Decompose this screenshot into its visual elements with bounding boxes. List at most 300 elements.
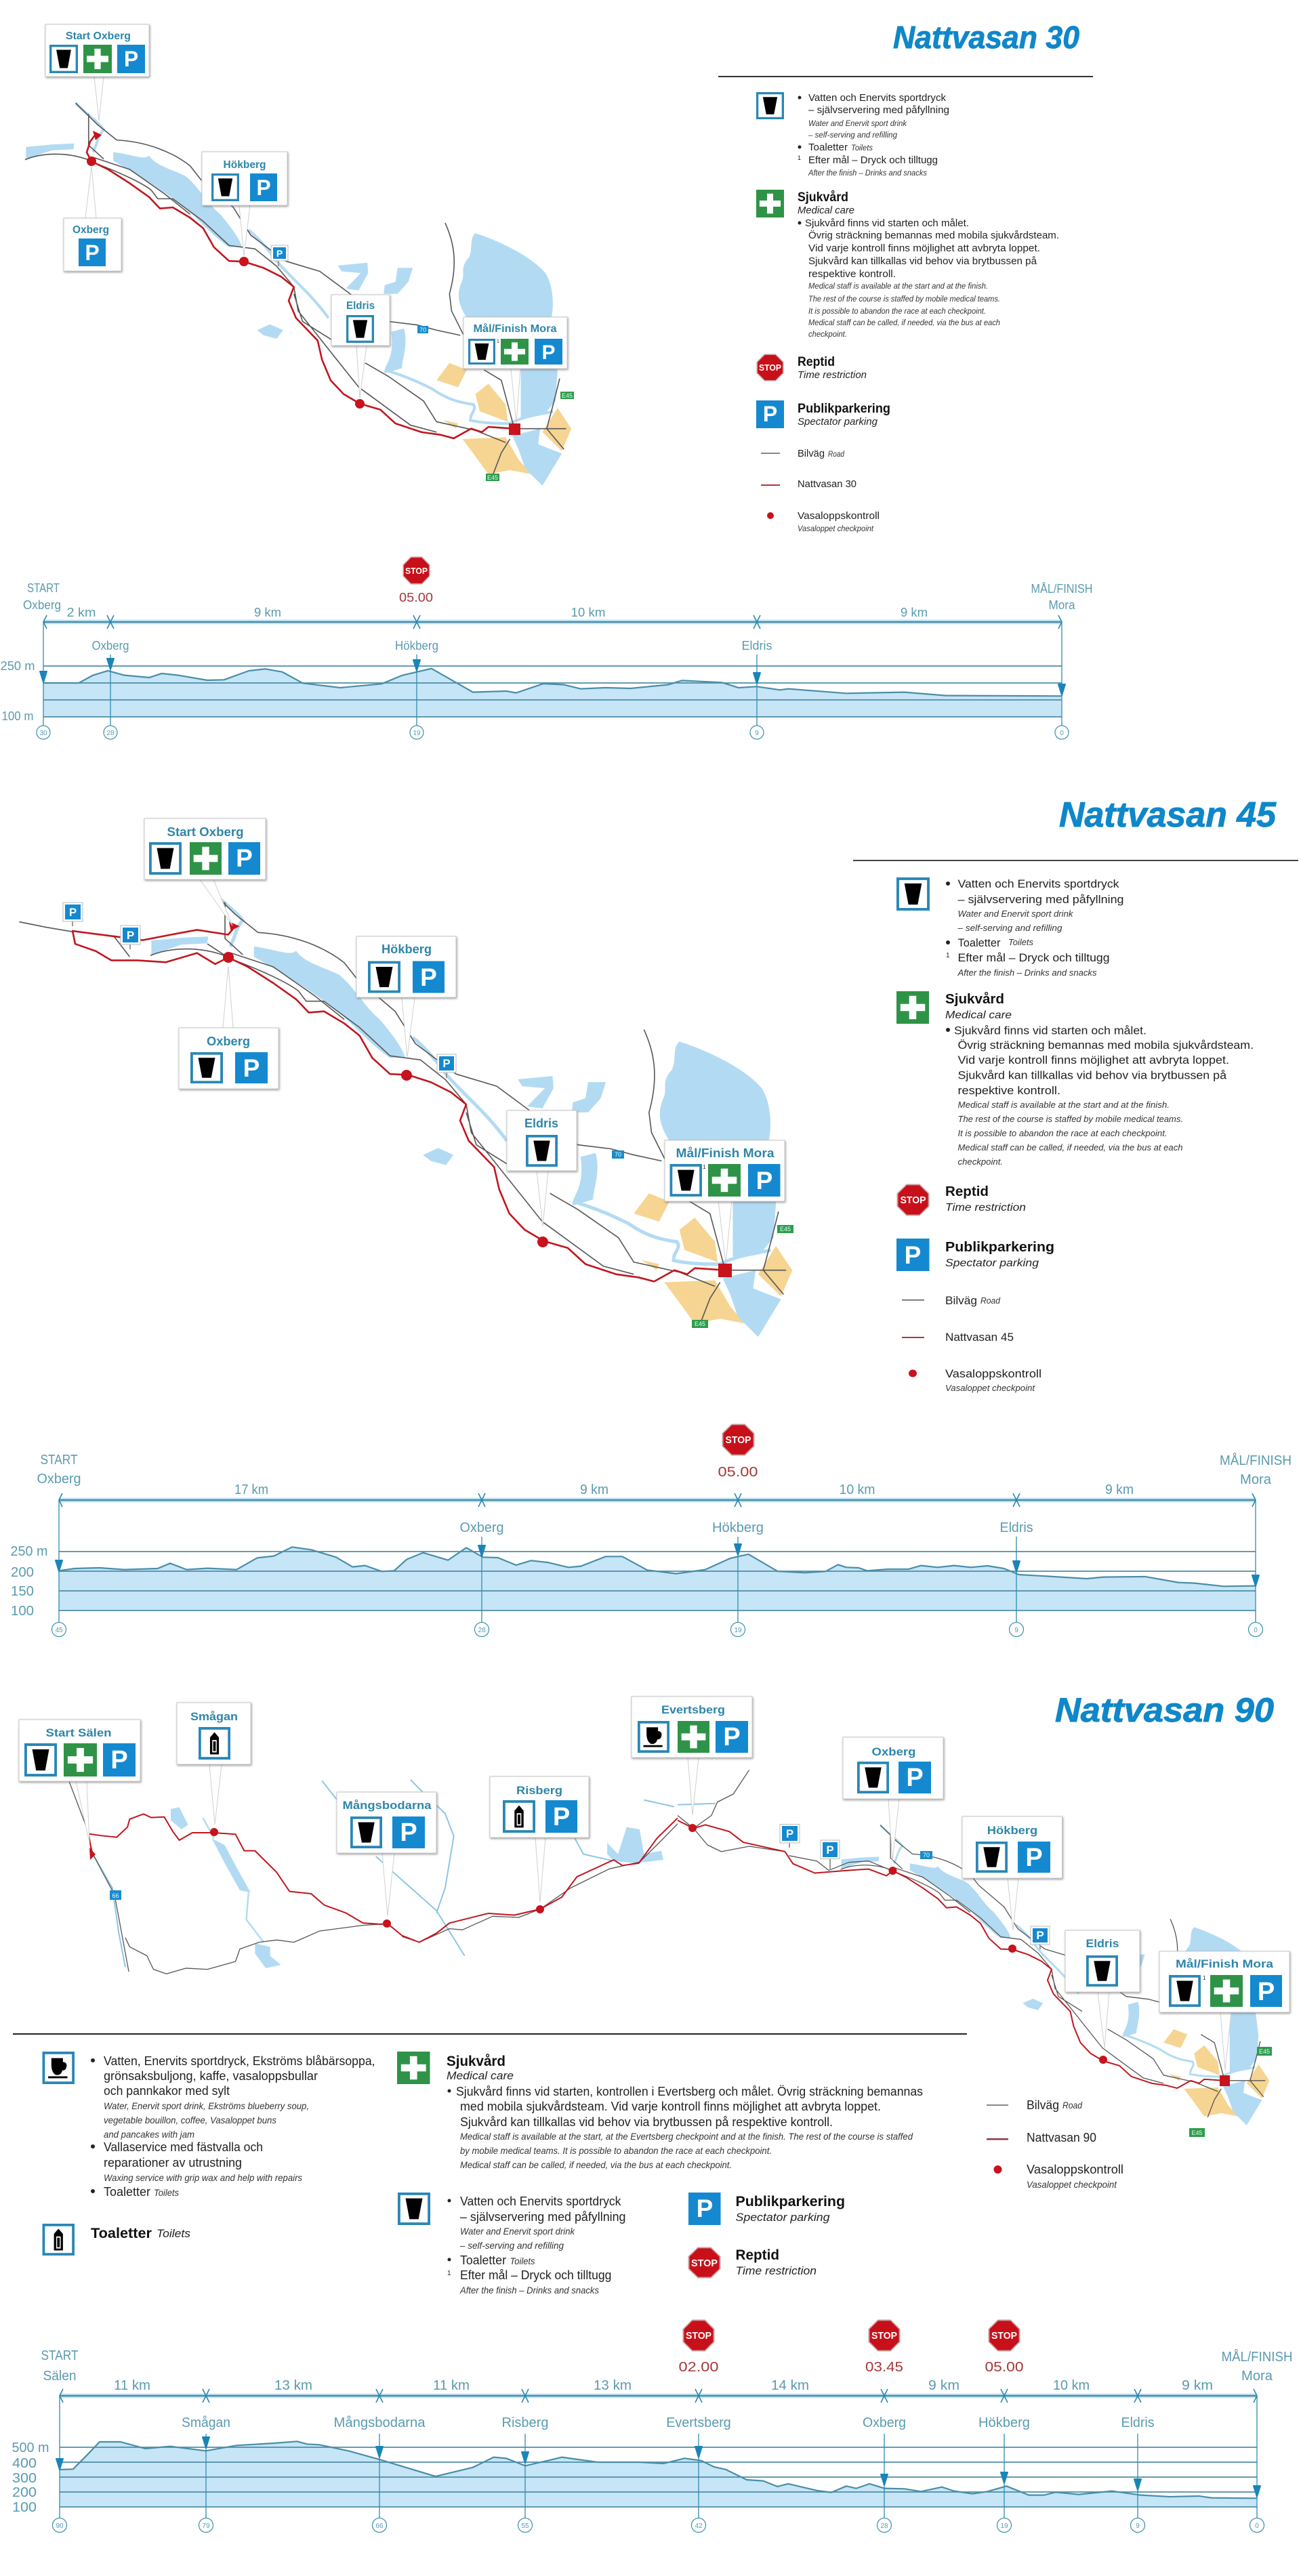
parking signs [63, 902, 456, 1078]
road sign 70 [920, 1851, 932, 1859]
axis labels: MÅL/FINISH [1031, 582, 1092, 596]
axis labels [0, 581, 1092, 723]
text: spectator parking: Publikparkering [798, 402, 890, 416]
distance markers: 55 [521, 2522, 529, 2530]
parking signs: P [127, 929, 134, 942]
text: water service: 1 [447, 2270, 451, 2277]
legend: checkpoint: Vasaloppet checkpoint [798, 525, 874, 533]
axis labels: Mora [1241, 2369, 1273, 2384]
callout: Smågan: Smågan [190, 1710, 238, 1723]
distance markers: 30 [39, 730, 47, 737]
text: medical care [447, 2054, 923, 2170]
callout: Oxberg [843, 1737, 943, 1861]
text: spectator parking [798, 402, 890, 428]
text: coffee station services: reparationer av utrustning [104, 2156, 242, 2169]
text: coffee station services: Vallaservice med fästvalla och [104, 2140, 263, 2154]
axis labels: 13 km [274, 2378, 312, 2393]
text: coffee station services: vegetable bouillon, coffee, Vasaloppet buns [104, 2115, 276, 2125]
icon: parking [756, 400, 784, 428]
text: water service: – självservering med påfyllning [958, 893, 1123, 906]
icon: medical [896, 991, 929, 1024]
legend: checkpoint [993, 2163, 1123, 2190]
distance markers: 45 [55, 1627, 63, 1634]
callout: Eldris: Eldris [346, 300, 375, 312]
text: water service: Toaletter [958, 936, 1001, 949]
text: medical care: Medical care [447, 2069, 514, 2082]
legend: checkpoint [767, 510, 880, 533]
text: water service: Vatten och Enervits sportdryck [460, 2195, 621, 2208]
callout: Start Oxberg: P [124, 47, 138, 71]
axis labels: Hökberg [395, 639, 438, 652]
text: water service: Toilets [510, 2256, 535, 2266]
axis labels: 200 [11, 1565, 34, 1580]
icon: stop [756, 354, 784, 381]
text: medical care: by mobile medical teams. It is possible to abandon the race at each checkpoint. [460, 2145, 772, 2156]
callout: Risberg [490, 1777, 589, 1903]
axis labels: START [41, 2348, 79, 2363]
callout: Eldris [507, 1110, 577, 1226]
icon: water [758, 94, 783, 118]
callout: Smågan [177, 1703, 251, 1825]
axis labels: 200 [12, 2485, 37, 2500]
callout: Mål/Finish Mora [463, 317, 567, 423]
legend: road [902, 1294, 1001, 1307]
stop marker 05.00 [985, 2319, 1023, 2375]
text: medical care: respektive kontroll. [808, 268, 896, 280]
axis labels: Mora [1049, 598, 1075, 612]
text: time restriction [945, 1184, 1026, 1213]
axis labels: Eldris [1000, 1520, 1033, 1535]
text: water service: – självservering med påfyllning [808, 104, 949, 116]
elevation profile: Nattvasan 45 [11, 1424, 1292, 1637]
text: medical care: The rest of the course is staffed by mobile medical teams. [808, 295, 1000, 304]
text: time restriction: Reptid [798, 355, 835, 369]
stop marker 05.00: STOP [405, 566, 428, 576]
icon: start flag [93, 131, 102, 140]
text: medical care: It is possible to abandon the race at each checkpoint. [808, 308, 986, 316]
callout: Hökberg: P [256, 175, 271, 200]
text: water service: After the finish – Drinks and snacks [808, 169, 927, 178]
text: medical care: Övrig sträckning bemannas med mobila sjukvårdsteam. [808, 229, 1059, 241]
text: water service: Vatten och Enervits sportdryck [958, 877, 1119, 890]
parking signs: P [1036, 1929, 1044, 1942]
text: coffee station services: and pancakes with jam [104, 2129, 194, 2140]
parking sign: P [276, 248, 283, 259]
distance markers: 79 [202, 2522, 210, 2530]
road sign E45 [777, 1225, 793, 1233]
distance markers: 28 [478, 1627, 486, 1634]
axis labels: 9 km [928, 2378, 959, 2393]
text: water service: Efter mål – Dryck och tilltugg [958, 951, 1110, 964]
road sign 70 [612, 1150, 624, 1159]
checkpoint Eldris [355, 399, 365, 409]
icon: coffee station [43, 2053, 73, 2083]
icon: parking [896, 1239, 930, 1271]
callout: Hökberg [202, 152, 287, 256]
parking signs [780, 1824, 1050, 1949]
text: medical care: Medical staff is available at the start, at the Evertsberg checkpoint and at the finish. The rest of the course is staffed [460, 2131, 913, 2142]
callout: Oxberg: P [906, 1764, 924, 1792]
text: water service: Toaletter [808, 142, 848, 153]
legend: road [987, 2098, 1083, 2112]
icon: parking: P [697, 2195, 713, 2222]
text: coffee station services: och pannkakor med sylt [104, 2084, 230, 2098]
callout: Start Oxberg [45, 24, 149, 121]
callout: Start Sälen [19, 1720, 140, 1843]
axis labels: Sälen [43, 2369, 76, 2384]
icon: stop: STOP [900, 1194, 926, 1206]
distance markers [37, 726, 1069, 739]
distance markers: 28 [106, 730, 115, 737]
text: coffee station services: Waxing service with grip wax and help with repairs [104, 2172, 302, 2183]
axis labels: 400 [12, 2456, 37, 2471]
legend rule [718, 76, 1093, 77]
callout: Mål/Finish Mora [665, 1140, 785, 1264]
icon: stop [688, 2247, 721, 2279]
axis labels: Eldris [741, 639, 772, 652]
callout: Oxberg: Oxberg [871, 1745, 916, 1758]
axis labels: 13 km [594, 2378, 632, 2393]
text: medical care: Sjukvård kan tillkallas vid behov via brytbussen på respektive kontroll. [460, 2115, 833, 2129]
text: spectator parking: Spectator parking [736, 2211, 830, 2224]
distance markers: 9 [755, 730, 759, 737]
axis labels: 10 km [1053, 2378, 1090, 2393]
callout: Mångsbodarna [337, 1792, 436, 1916]
text: toilets: Toaletter [91, 2226, 152, 2241]
text: medical care: Sjukvård finns vid starten, kontrollen i Evertsberg och målet. Övrig sträckning bemannas [456, 2085, 923, 2098]
text: water service: Water and Enervit sport drink [808, 120, 907, 128]
axis labels: Risberg [501, 2415, 549, 2430]
parking signs: P [69, 906, 77, 919]
road sign E45: E45 [1259, 2048, 1270, 2055]
axis labels: Evertsberg [666, 2415, 731, 2430]
axis labels [11, 1453, 1292, 1619]
callout: Oxberg [179, 966, 278, 1089]
legend: checkpoint: Vasaloppskontroll [798, 510, 880, 522]
distance markers [51, 1622, 1263, 1637]
stop marker 05.00: 05.00 [399, 591, 433, 604]
axis labels: 11 km [114, 2378, 150, 2393]
axis labels: MÅL/FINISH [1221, 2349, 1293, 2365]
road sign E45 south: E45 [1191, 2130, 1203, 2136]
legend: road [761, 448, 845, 459]
legend: checkpoint: Vasaloppet checkpoint [1027, 2179, 1117, 2190]
legend: route: Nattvasan 30 [798, 478, 856, 490]
callout: Mål/Finish Mora: 1 [1203, 1975, 1206, 1981]
text: medical care: Medical care [798, 205, 854, 216]
callout: Hökberg [962, 1816, 1062, 1930]
callout: Start Sälen: P [110, 1746, 128, 1774]
axis labels: 11 km [433, 2378, 470, 2393]
text: medical care: Vid varje kontroll finns möjlighet att avbryta loppet. [958, 1054, 1229, 1066]
road sign 70 [417, 326, 428, 333]
callout: Hökberg: Hökberg [987, 1824, 1037, 1837]
map: Nattvasan 30 [25, 24, 574, 486]
text: water service: Vatten och Enervits sportdryck [808, 92, 946, 104]
axis labels: 2 km [66, 606, 96, 619]
text: medical care: med mobila sjukvårdsteam. Vid varje kontroll finns möjlighet att avbryta loppet. [460, 2100, 881, 2113]
distance markers: 9 [1014, 1627, 1018, 1634]
distance markers: 42 [695, 2522, 703, 2530]
text: toilets: Toilets [157, 2227, 191, 2240]
axis labels: START [41, 1453, 77, 1468]
road sign E45 [1257, 2047, 1272, 2056]
text: time restriction: Reptid [736, 2247, 779, 2263]
legend: road: Road [828, 451, 845, 459]
text: time restriction: Reptid [945, 1184, 989, 1199]
axis labels: 17 km [234, 1482, 268, 1497]
distance markers: 28 [880, 2522, 888, 2530]
stop marker 02.00: STOP [686, 2330, 711, 2342]
elevation profile: Nattvasan 90 [12, 2319, 1293, 2533]
legend: checkpoint: Vasaloppet checkpoint [945, 1383, 1035, 1393]
text: medical care: The rest of the course is staffed by mobile medical teams. [958, 1114, 1183, 1124]
legend: checkpoint [909, 1367, 1041, 1393]
legend: road: Bilväg [1027, 2098, 1059, 2112]
axis labels: 300 [12, 2471, 37, 2486]
axis labels: Eldris [1121, 2415, 1155, 2430]
axis labels: Oxberg [863, 2415, 906, 2430]
text: water service: After the finish – Drinks and snacks [957, 968, 1097, 978]
stop marker 03.45: 03.45 [865, 2360, 903, 2375]
callout: Eldris: Eldris [524, 1117, 558, 1130]
stop marker 05.00: 05.00 [718, 1465, 758, 1480]
road sign E45 south: E45 [487, 474, 498, 481]
axis labels: Oxberg [459, 1520, 504, 1535]
text: spectator parking [736, 2194, 845, 2224]
road sign E45: E45 [562, 392, 573, 399]
callout: Mål/Finish Mora: Mål/Finish Mora [676, 1146, 775, 1160]
distance markers: 0 [1255, 2522, 1259, 2530]
text: water service: After the finish – Drinks and snacks [459, 2285, 599, 2295]
callout: Oxberg: P [85, 241, 100, 265]
axis labels: 9 km [580, 1482, 608, 1497]
text: coffee station services: Toaletter [104, 2185, 150, 2199]
callout: Evertsberg: P [723, 1723, 741, 1751]
title: Nattvasan 45: Nattvasan 45 [1059, 795, 1277, 835]
callout: Start Oxberg: Start Oxberg [167, 825, 244, 839]
elevation profile: Nattvasan 30 [0, 556, 1092, 739]
text: coffee station services [91, 2054, 375, 2199]
callout: Mål/Finish Mora: P [1258, 1978, 1275, 2006]
text: medical care: checkpoint. [958, 1157, 1003, 1167]
text: water service [447, 2195, 626, 2295]
text: time restriction: Time restriction [798, 369, 867, 381]
callout: Hökberg: Hökberg [224, 159, 266, 171]
callout: Oxberg [64, 166, 121, 271]
distance markers: 90 [56, 2522, 64, 2530]
callout: Evertsberg: Evertsberg [661, 1703, 725, 1716]
callout: Mångsbodarna: P [400, 1819, 417, 1847]
callout: Hökberg: P [1025, 1844, 1043, 1872]
text: medical care: Sjukvård [447, 2054, 505, 2069]
stop marker 05.00 [718, 1424, 758, 1480]
text: water service: Efter mål – Dryck och tilltugg [808, 154, 938, 166]
distance markers: 19 [734, 1627, 742, 1634]
callout: Mål/Finish Mora: P [756, 1167, 772, 1194]
callout: Mål/Finish Mora [1159, 1951, 1289, 2070]
text: medical care: Sjukvård finns vid starten och målet. [805, 217, 969, 229]
text: water service: 1 [946, 952, 950, 959]
legend: road: Bilväg [945, 1294, 977, 1307]
axis labels: Mångsbodarna [333, 2415, 426, 2430]
text: water service: – self-serving and refilling [459, 2240, 564, 2251]
axis labels: 9 km [254, 606, 281, 619]
legend: road: Road [1062, 2100, 1083, 2111]
legend: checkpoint: Vasaloppskontroll [945, 1367, 1041, 1380]
text: spectator parking: Spectator parking [945, 1258, 1039, 1269]
axis labels: Mora [1240, 1472, 1272, 1487]
text: medical care [798, 190, 1059, 339]
axis labels: Oxberg [92, 639, 129, 652]
axis labels: 9 km [1105, 1482, 1134, 1497]
axis labels: 10 km [839, 1482, 875, 1497]
axis labels: Oxberg [37, 1472, 81, 1487]
text: water service: – självservering med påfyllning [460, 2210, 626, 2224]
axis labels: MÅL/FINISH [1220, 1453, 1292, 1468]
text: spectator parking [945, 1240, 1054, 1269]
axis labels: Oxberg [23, 598, 61, 612]
callout: Eldris [331, 295, 390, 398]
text: medical care: respektive kontroll. [958, 1084, 1060, 1097]
stop marker 03.45: STOP [871, 2330, 897, 2342]
icon: medical [756, 190, 784, 217]
callout: Mål/Finish Mora: Mål/Finish Mora [1176, 1957, 1274, 1970]
legend: route: Nattvasan 45 [945, 1331, 1014, 1344]
legend: Nattvasan 30 [756, 92, 1059, 533]
checkpoint Eldris [537, 1237, 548, 1247]
text: medical care: Medical staff is available at the start and at the finish. [808, 283, 988, 291]
text: medical care: Medical staff is available at the start and at the finish. [958, 1100, 1170, 1110]
text: medical care: checkpoint. [808, 331, 847, 339]
text: toilets [91, 2226, 191, 2241]
legend rule [13, 2033, 967, 2035]
icon: parking [688, 2193, 721, 2225]
callout: Risberg: P [553, 1803, 570, 1831]
text: water service: Toilets [851, 144, 873, 152]
legend: route: Nattvasan 90 [1027, 2131, 1096, 2144]
text: medical care: Medical staff can be called, if needed, via the bus at each [958, 1142, 1183, 1152]
parking signs: P [442, 1057, 451, 1070]
legend: checkpoint: Vasaloppskontroll [1027, 2163, 1123, 2176]
callout: Mål/Finish Mora: P [541, 341, 556, 364]
icon: start flag [89, 1848, 96, 1860]
distance markers [53, 2518, 1264, 2533]
axis labels: 100 m [1, 709, 34, 723]
icon: water [898, 879, 928, 909]
axis labels: 250 m [0, 659, 35, 673]
distance markers: 9 [1136, 2522, 1140, 2530]
icon: start flag [229, 921, 240, 931]
icon: toilets [43, 2225, 73, 2254]
callout: Risberg: Risberg [516, 1784, 562, 1797]
axis labels: Hökberg [978, 2415, 1030, 2430]
icon: parking: P [905, 1241, 921, 1269]
callout: Mångsbodarna: Mångsbodarna [343, 1799, 432, 1812]
text: water service: 1 [798, 154, 801, 161]
axis labels: 500 m [12, 2440, 49, 2455]
text: medical care [945, 991, 1254, 1167]
stop marker 05.00: STOP [991, 2330, 1017, 2342]
callout: Oxberg: Oxberg [73, 224, 109, 236]
callout: Hökberg: P [420, 963, 437, 991]
text: coffee station services: Water, Enervit sport drink, Ekströms blueberry soup, [104, 2100, 309, 2111]
axis labels: Smågan [182, 2415, 230, 2430]
title: Nattvasan 30: Nattvasan 30 [893, 20, 1079, 55]
distance markers: 0 [1060, 730, 1064, 737]
legend rule [853, 860, 1298, 861]
stop marker 02.00 [679, 2319, 718, 2375]
callout: Start Oxberg: P [236, 844, 253, 872]
callout: Eldris [1065, 1930, 1140, 2048]
text: water service: – self-serving and refilling [957, 923, 1062, 933]
text: water service: Toilets [1008, 937, 1033, 947]
parking signs: P [786, 1827, 793, 1840]
road sign E45 south [1189, 2128, 1205, 2137]
callout: Oxberg: Oxberg [207, 1035, 250, 1048]
text: time restriction [798, 355, 867, 381]
stop marker 03.45 [865, 2319, 903, 2375]
text: water service [798, 92, 949, 178]
checkpoint Oxberg [87, 157, 96, 166]
text: medical care: Sjukvård kan tillkallas vid behov via brytbussen på [808, 255, 1037, 267]
road sign 66: 66 [112, 1892, 119, 1899]
icon: stop: STOP [759, 362, 781, 373]
legend: Nattvasan 45 [896, 877, 1254, 1393]
text: spectator parking: Publikparkering [736, 2194, 845, 2209]
distance markers: 19 [413, 730, 421, 737]
parking sign [271, 245, 288, 266]
axis labels: 10 km [571, 606, 606, 619]
title: Nattvasan 90: Nattvasan 90 [1055, 1691, 1274, 1729]
text: time restriction: Time restriction [945, 1202, 1026, 1213]
text: water service: Water and Enervit sport drink [460, 2226, 575, 2237]
callout: Start Oxberg [144, 818, 266, 926]
icon: medical [397, 2052, 430, 2084]
callout: Mål/Finish Mora: Mål/Finish Mora [473, 323, 557, 335]
checkpoint Hökberg [239, 257, 249, 266]
road sign 70: 70 [615, 1151, 621, 1158]
axis labels: 9 km [901, 606, 928, 619]
text: medical care: Sjukvård finns vid starten och målet. [954, 1024, 1147, 1037]
axis labels: 100 [12, 2500, 37, 2515]
text: water service: Toaletter [460, 2253, 506, 2267]
road sign E45 south: E45 [695, 1321, 705, 1327]
text: time restriction [736, 2247, 817, 2277]
icon: parking: P [763, 402, 777, 426]
text: medical care: Övrig sträckning bemannas med mobila sjukvårdsteam. [958, 1039, 1254, 1052]
callout: Eldris: Eldris [1086, 1937, 1119, 1950]
callout: Evertsberg [632, 1697, 752, 1815]
finish marker Mora [509, 423, 520, 435]
text: water service: Water and Enervit sport drink [958, 909, 1074, 919]
axis labels: Hökberg [712, 1520, 764, 1535]
road sign 70: 70 [419, 327, 426, 333]
road sign E45: E45 [780, 1226, 791, 1232]
callout: Oxberg: P [243, 1054, 260, 1082]
legend: road: Bilväg [798, 448, 825, 459]
icon: stop [896, 1184, 930, 1216]
text: time restriction: Time restriction [736, 2264, 817, 2277]
callout: Mål/Finish Mora: 1 [497, 339, 499, 344]
callout: Start Oxberg: Start Oxberg [66, 30, 131, 42]
callout: Start Sälen: Start Sälen [46, 1726, 111, 1739]
text: spectator parking: Publikparkering [945, 1240, 1054, 1255]
parking signs: P [826, 1844, 834, 1856]
text: medical care: Medical staff can be called, if needed, via the bus at each checkpoint. [460, 2159, 732, 2170]
text: medical care: Sjukvård [945, 991, 1004, 1007]
distance markers: 19 [1000, 2522, 1008, 2530]
